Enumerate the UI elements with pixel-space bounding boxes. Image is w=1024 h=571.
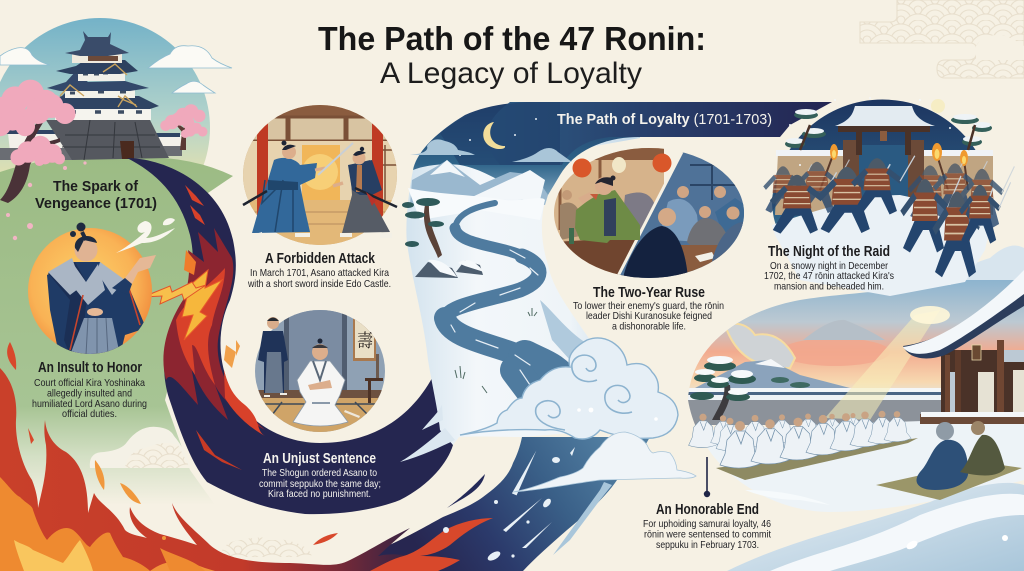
green hill (0, 156, 233, 505)
sky circle (0, 18, 210, 172)
text: two-year ruse: The Two-Year Ruse (593, 285, 705, 301)
figure: Asano attacking (243, 140, 353, 240)
snow in lower band (443, 447, 612, 563)
text: forbidden attack: In March 1701, Asano attacked Kira (250, 268, 389, 279)
text: unjust sentence: Kira faced no punishment. (268, 489, 371, 500)
front row ronin (720, 411, 911, 468)
swirling cloud (460, 338, 678, 439)
grass tufts (455, 308, 537, 393)
panel: forbidden attack (243, 105, 397, 290)
lightning bolt (143, 282, 206, 304)
snow fields (408, 188, 545, 220)
falling snow (789, 97, 951, 166)
back samurai (765, 160, 1014, 228)
night sky (413, 102, 640, 205)
text: two-year ruse (573, 285, 724, 332)
flame tail on river (370, 518, 493, 571)
text: an honorable end: seppuku in February 1703. (656, 540, 759, 551)
text: two-year ruse: To lower their enemy's guard, the rōnin (573, 301, 724, 312)
panel: fire and dark path (0, 158, 650, 571)
moon (931, 99, 945, 113)
text: spark heading (35, 178, 157, 212)
text: night of the raid: The Night of the Raid (768, 244, 890, 260)
illustration: insult (28, 222, 156, 360)
pine trees (785, 111, 992, 148)
wall (688, 388, 941, 392)
back row ronin (689, 413, 864, 451)
banner (487, 102, 832, 165)
text: insult: humiliated Lord Asano during (32, 399, 147, 410)
lower river band (320, 437, 650, 571)
sunlight glow (910, 306, 950, 324)
flames over band (163, 228, 265, 430)
mat front row (716, 438, 918, 480)
snow body (406, 120, 640, 445)
text: unjust sentence (259, 451, 381, 500)
text: insult: official duties. (62, 409, 117, 420)
shading on right of snow (540, 300, 590, 360)
text: insult (32, 360, 147, 420)
pine tree (712, 385, 730, 420)
text: forbidden attack: with a short sword inside Edo Castle. (247, 279, 391, 290)
title (318, 20, 706, 90)
text: insult: Court official Kira Yoshinaka (34, 378, 145, 389)
text: spark heading: The Spark of (53, 178, 139, 195)
sky clouds (725, 324, 795, 368)
panel: castle and spark of vengeance (0, 18, 233, 505)
text: unjust sentence: The Shogun ordered Asano to (262, 468, 377, 479)
text: forbidden attack: A Forbidden Attack (265, 251, 376, 267)
panel: two-year ruse (554, 148, 760, 332)
panel: honorable end scene (643, 246, 1024, 571)
clouds in night sky (410, 139, 572, 162)
stars (459, 118, 546, 156)
panel: unjust sentence (255, 310, 385, 500)
cherry tree left (0, 80, 75, 203)
heading: path of loyalty: The Path of Loyalty (1701-1703) (557, 111, 772, 128)
castle (0, 31, 182, 160)
peach glow (788, 340, 886, 366)
panel: snowy path of loyalty (400, 102, 832, 563)
pin marker (704, 457, 710, 497)
text: an honorable end: An Honorable End (656, 502, 759, 518)
distant mountains (695, 360, 850, 388)
text: two-year ruse: a dishonorable life. (612, 322, 686, 332)
ground snow (707, 421, 1024, 512)
snow mounds (727, 483, 1024, 571)
pale cloud in field (50, 427, 190, 505)
text: unjust sentence: commit seppuko the same day; (259, 479, 381, 490)
tavern patrons (560, 202, 578, 240)
crescent moon (483, 122, 505, 149)
elders on mat (876, 421, 1022, 500)
text: an honorable end (643, 502, 771, 551)
decorative cloud pattern top right (860, 0, 1024, 78)
petals on hill (6, 161, 87, 240)
illustration: tavern and plotters (554, 148, 760, 278)
clouds over sky (0, 46, 232, 93)
text: night of the raid: On a snowy night in December (770, 261, 888, 272)
ground flames (0, 368, 440, 571)
river upper (445, 203, 565, 410)
title: The Path of the 47 Ronin: (318, 20, 706, 57)
icons: lanterns (572, 154, 672, 178)
lower white cloud (513, 432, 696, 492)
text: forbidden attack (247, 251, 391, 290)
illustration: seppuku (255, 310, 385, 432)
figure: Asano kneeling (293, 338, 348, 426)
mountains (410, 160, 548, 205)
figure: standing witness (258, 317, 288, 397)
text: scroll calligraphy: 壽 (357, 331, 373, 351)
text: spark heading: Vengeance (1701) (35, 195, 157, 212)
snow wisps over navy (400, 405, 455, 462)
figure: dark cloaked man (623, 226, 688, 278)
cherry tree right (160, 104, 208, 150)
text: two-year ruse: leader Dishi Kuranosuke feigned (586, 311, 712, 322)
title: A Legacy of Loyalty (380, 57, 642, 90)
floating embers (7, 342, 338, 545)
text: night of the raid: mansion and beheaded him. (774, 282, 884, 292)
torches (820, 143, 968, 190)
front samurai (772, 156, 1011, 277)
small pines (771, 377, 810, 388)
text: an honorable end: rōnin were sentensed to commit (644, 530, 771, 540)
text: an honorable end: For uphoiding samurai loyalty, 46 (643, 519, 771, 530)
head dark man (658, 208, 676, 226)
panel: insult to honor (28, 178, 175, 420)
clouds around scene (820, 246, 1024, 320)
dark wisp (447, 474, 485, 508)
temple building (903, 270, 1024, 424)
text: insult: allegedly insulted and (47, 388, 132, 400)
text: insult: An Insult to Honor (38, 360, 142, 376)
text: night of the raid (764, 244, 894, 292)
sun beams (826, 318, 931, 420)
illustration: duel (243, 105, 397, 245)
snowy ground (772, 195, 993, 296)
text: night of the raid: 1702, the 47 rōnin attacked Kira's (764, 271, 894, 282)
dark road band (127, 158, 453, 514)
illustration: raid scene (765, 97, 1014, 296)
pale waves bottom (220, 538, 312, 557)
plotters (662, 199, 700, 242)
text: unjust sentence: An Unjust Sentence (263, 451, 376, 467)
gate (835, 106, 935, 210)
river highlights (451, 250, 538, 385)
panel: night of the raid (764, 97, 1014, 296)
figure: Kira recoiling (333, 147, 397, 238)
snowy pine tree (402, 198, 484, 278)
icon: angry smoke (116, 218, 175, 253)
figure: Oishi drinking (569, 176, 640, 244)
compound wall (775, 153, 993, 215)
